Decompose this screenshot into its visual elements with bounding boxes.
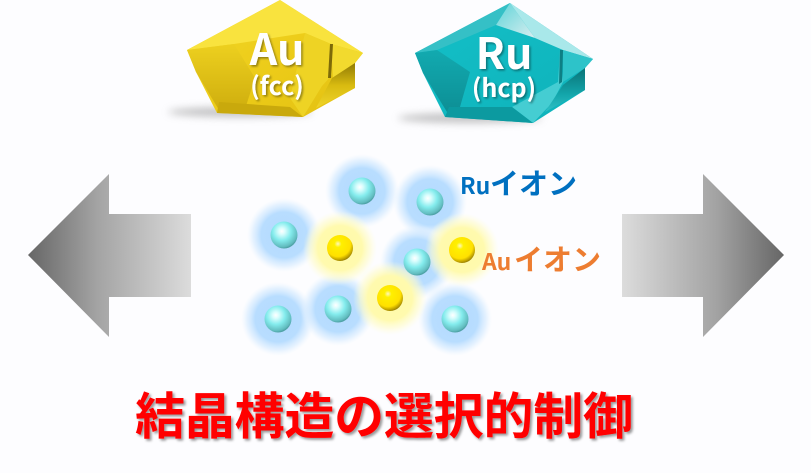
label: Ru (hcp) <box>472 20 536 105</box>
icon: gold crystal Au (fcc) <box>168 0 363 117</box>
label: Au ion: イオン <box>514 237 601 279</box>
icon: ruthenium crystal Ru (hcp) <box>398 3 593 123</box>
Ru ions <box>264 178 468 332</box>
arrow: right <box>622 174 784 337</box>
label: Ru ion: Ru <box>460 167 490 201</box>
label: Au (fcc) <box>249 16 304 103</box>
ion cluster <box>241 154 499 356</box>
label: Au (fcc): (fcc) <box>250 67 304 103</box>
arrow: left <box>28 174 191 337</box>
title: 結晶構造の選択的制御 <box>135 377 633 449</box>
label: Ru (hcp): Ru <box>476 20 532 82</box>
label: Au (fcc): Au <box>249 16 304 78</box>
glow halos <box>241 154 499 356</box>
label: Ru (hcp): (hcp) <box>472 69 536 105</box>
label: Au ion: Au <box>481 243 511 277</box>
Au ions <box>327 235 475 311</box>
label: Ru ion: イオン <box>490 161 577 203</box>
